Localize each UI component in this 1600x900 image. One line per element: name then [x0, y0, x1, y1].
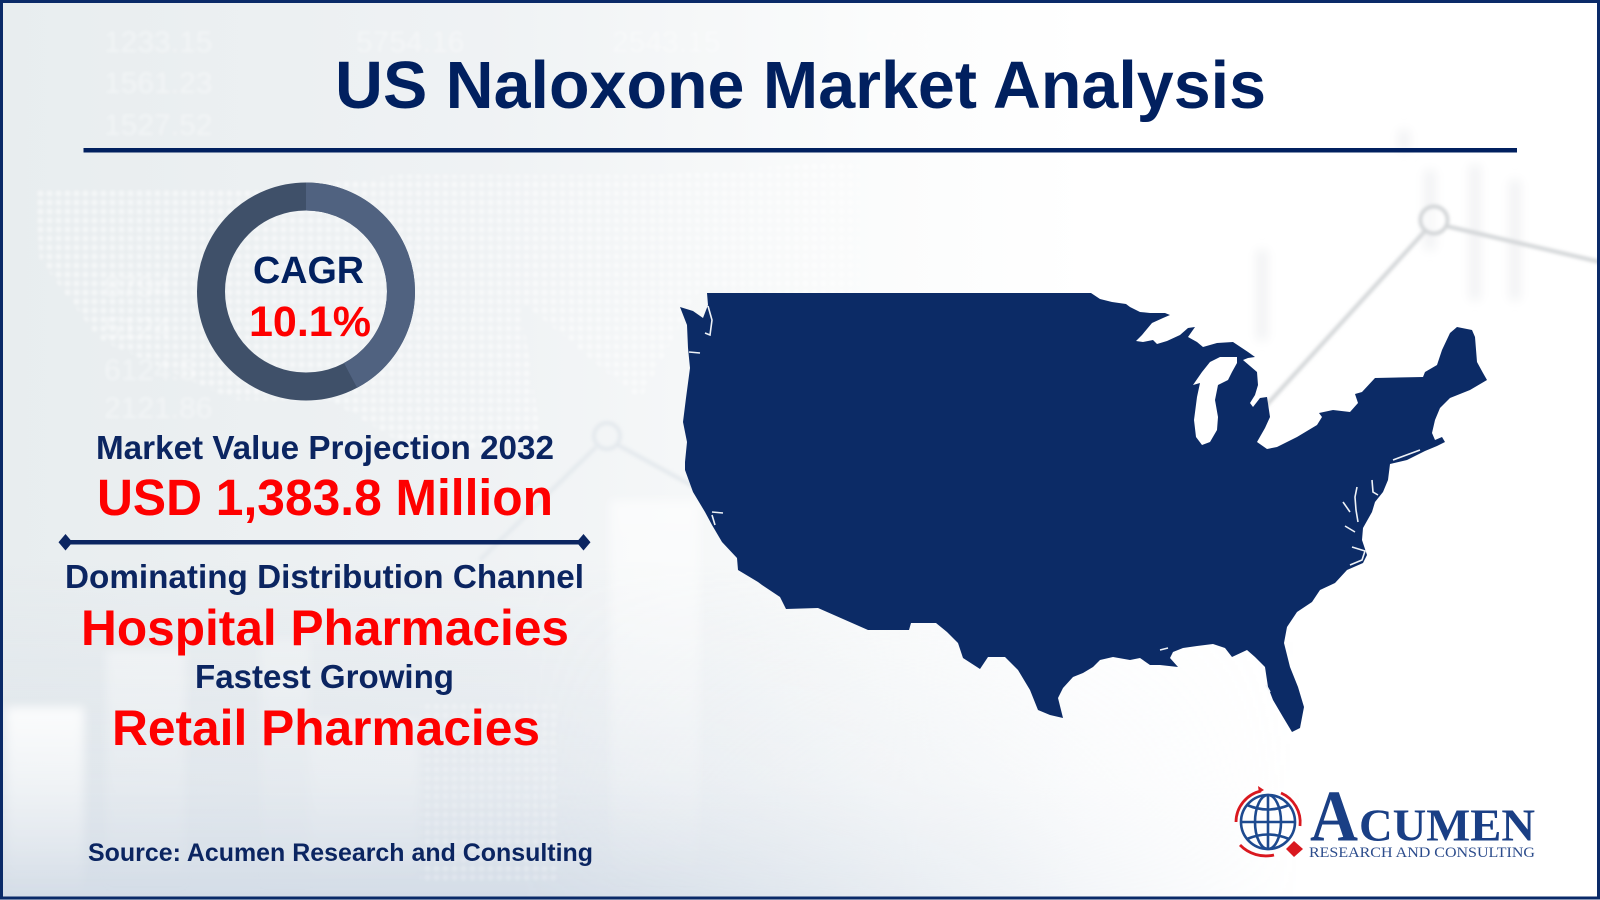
dominating channel: Hospital Pharmacies [81, 600, 569, 656]
fastest growing label: Fastest Growing [195, 658, 454, 695]
title rule [84, 148, 1517, 152]
background: 5754.16 [865, 26, 973, 59]
CAGR donut [211, 196, 401, 386]
background: 6124.5 [104, 354, 196, 387]
logo tagline: RESEARCH AND CONSULTING [1309, 845, 1535, 861]
background: 5124 [104, 312, 171, 345]
title: US Naloxone Market Analysis [335, 48, 1266, 123]
logo: Acumen Research and Consulting [1236, 776, 1535, 861]
background: 2121.86 [104, 392, 212, 425]
distribution label: Dominating Distribution Channel [65, 558, 584, 595]
background: 2543.15 [612, 26, 720, 59]
background: 8794 [104, 271, 171, 304]
background: 5754.16 [356, 26, 464, 59]
CAGR value: 10.1% [249, 298, 371, 346]
background: 1527.52 [104, 109, 212, 142]
map: coastal inlets [689, 306, 1420, 692]
background: 1233.15 [104, 26, 212, 59]
market value figure: USD 1,383.8 Million [97, 469, 553, 526]
market value label: Market Value Projection 2032 [96, 429, 554, 466]
logo wordmark small caps: CUMEN [1359, 800, 1535, 850]
logo globe icon [1236, 786, 1303, 857]
fastest growing channel: Retail Pharmacies [112, 700, 540, 756]
map: contiguous United States [680, 293, 1487, 732]
background: 1561.23 [104, 67, 212, 100]
CAGR label: CAGR [253, 250, 364, 292]
diamond divider [58, 534, 590, 550]
source: Source: Acumen Research and Consulting [88, 839, 593, 867]
logo wordmark: A [1310, 776, 1358, 856]
donut ring [211, 196, 401, 386]
